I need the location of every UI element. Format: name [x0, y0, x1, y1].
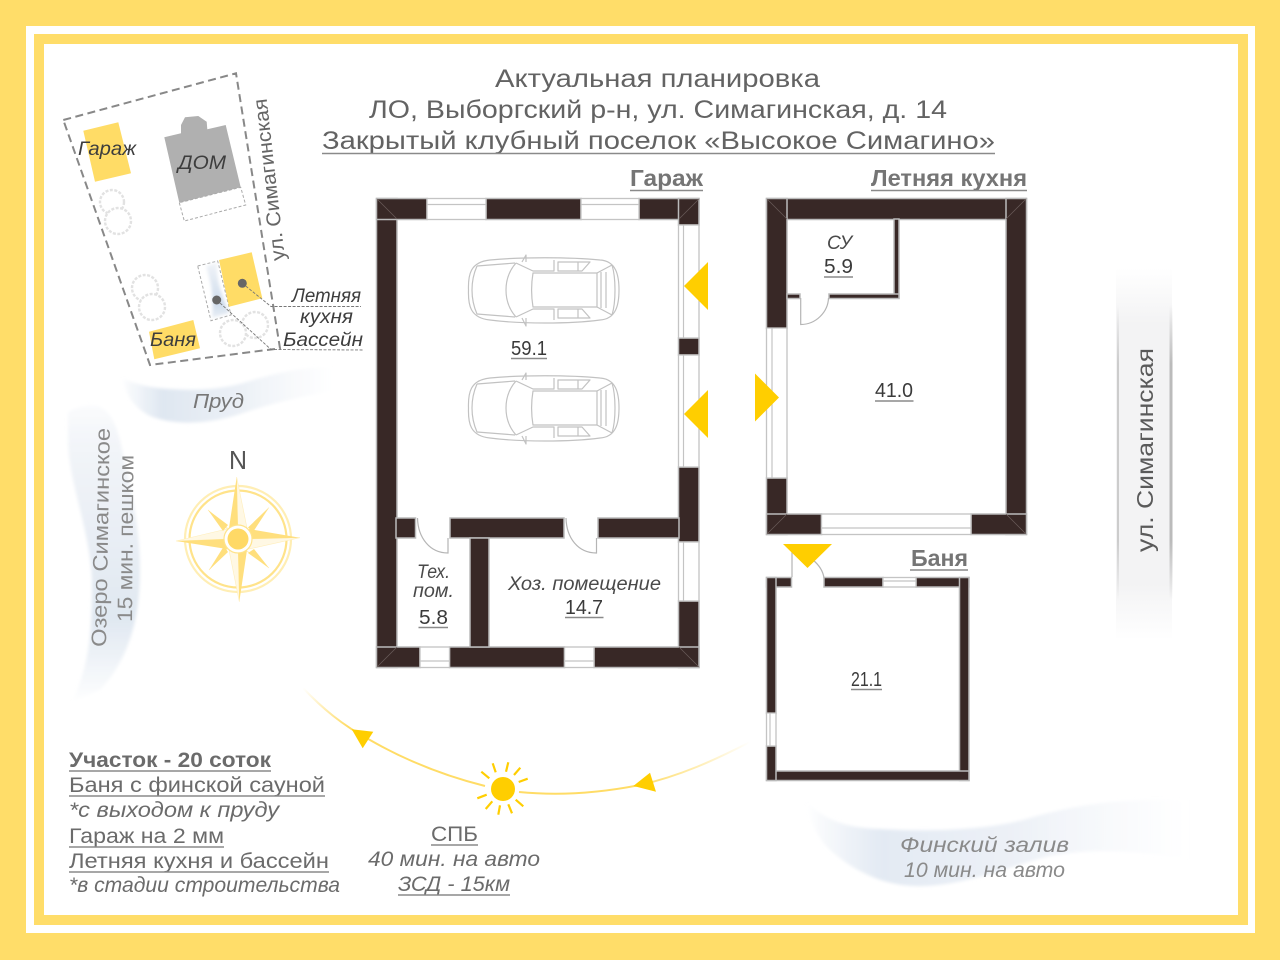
lake label: [88, 428, 138, 647]
garage heading: Гараж: [630, 165, 704, 191]
compass: [176, 445, 300, 602]
site labels: ДОМ: [176, 153, 226, 174]
summer kitchen plan: [766, 165, 1027, 534]
SPB distance: ЗСД - 15км: [398, 873, 510, 896]
entry arrow: bathhouse: [783, 544, 832, 568]
title: ЛО, Выборгский р-н, ул. Симагинская, д. 14: [369, 96, 947, 124]
tech room label: Тех.: [417, 562, 450, 583]
property summary: Летняя кухня и бассейн: [69, 850, 329, 873]
tech room label: пом.: [413, 581, 454, 602]
kitchen door: [801, 298, 828, 324]
water: gulf: [807, 800, 1188, 886]
garage block: [83, 122, 131, 182]
water: lake: [68, 405, 140, 702]
property summary: [69, 749, 340, 897]
SPB distance: 40 мин. на авто: [368, 848, 540, 871]
lake label: Озеро Симагинское: [88, 428, 115, 647]
bathhouse heading: Баня: [911, 545, 968, 571]
garage doors: [418, 518, 596, 553]
kitchen heading: Летняя кухня: [871, 165, 1027, 191]
road: Симагинская: [1116, 268, 1172, 640]
markers: [212, 279, 247, 304]
bathhouse area: 21.1: [851, 669, 882, 691]
water: pond: [122, 367, 332, 423]
bathroom label: 5.9: [824, 256, 853, 278]
site labels: Бассейн: [283, 330, 364, 351]
utility room label: 14.7: [565, 597, 603, 619]
north letter: N: [229, 445, 247, 475]
bathhouse door: [792, 547, 824, 578]
garage walls: [376, 198, 699, 668]
bathhouse plan: [766, 545, 969, 780]
car 2: [468, 373, 619, 444]
site street label: ул. Симагинская: [250, 97, 290, 262]
leader lines: [217, 283, 363, 350]
site labels: Летняя: [290, 286, 361, 307]
kitchen windows: [766, 328, 971, 534]
bathhouse walls: [766, 578, 969, 780]
title: [322, 65, 995, 155]
property summary: Гараж на 2 мм: [69, 825, 224, 848]
road label: ул. Симагинская: [1132, 348, 1158, 552]
tech room label: [413, 562, 454, 629]
bathhouse block: [149, 320, 200, 359]
bathroom label: СУ: [827, 233, 854, 254]
SPB distance: СПБ: [431, 823, 478, 846]
car 1: [468, 255, 619, 326]
bathhouse windows: [766, 578, 916, 746]
site labels: Баня: [150, 330, 196, 351]
site labels: [78, 139, 364, 351]
site plan: [63, 73, 364, 365]
utility room label: [507, 574, 661, 619]
property summary: *с выходом к пруду: [69, 799, 281, 822]
site labels: Гараж: [78, 139, 137, 160]
property summary: Баня с финской сауной: [69, 774, 325, 797]
garage windows: [420, 198, 699, 668]
gulf label: [900, 834, 1069, 882]
house block: [164, 116, 246, 221]
title: Актуальная планировка: [495, 65, 820, 93]
pool: [198, 261, 231, 321]
trees: [100, 190, 268, 346]
icon: sun: [477, 762, 528, 815]
sun path left arc: [303, 688, 485, 786]
lake label: 15 мин. пешком: [114, 455, 138, 622]
entry arrow: kitchen: [755, 374, 779, 422]
tech room label: 5.8: [419, 607, 448, 629]
utility room label: Хоз. помещение: [507, 574, 661, 595]
arrow left: [352, 729, 373, 748]
garage plan: [376, 165, 704, 668]
SPB distance: [368, 823, 540, 896]
kitchen walls: [766, 198, 1026, 534]
bathroom label: [824, 233, 854, 278]
garage area: 59.1: [511, 338, 547, 360]
site boundary: [63, 73, 280, 365]
kitchen area: 41.0: [875, 380, 913, 402]
sun path right arc: [519, 742, 750, 794]
property summary: *в стадии строительства: [69, 874, 340, 897]
gulf label: Финский залив: [900, 834, 1069, 857]
entry arrows: garage: [684, 262, 708, 438]
arrow right: [633, 773, 656, 792]
summer kitchen block: [219, 252, 262, 307]
title: Закрытый клубный поселок «Высокое Симагино»: [322, 127, 995, 155]
gulf label: 10 мин. на авто: [904, 859, 1065, 882]
site labels: кухня: [300, 307, 353, 328]
property summary: Участок - 20 соток: [69, 749, 272, 772]
pond label: Пруд: [193, 391, 244, 413]
